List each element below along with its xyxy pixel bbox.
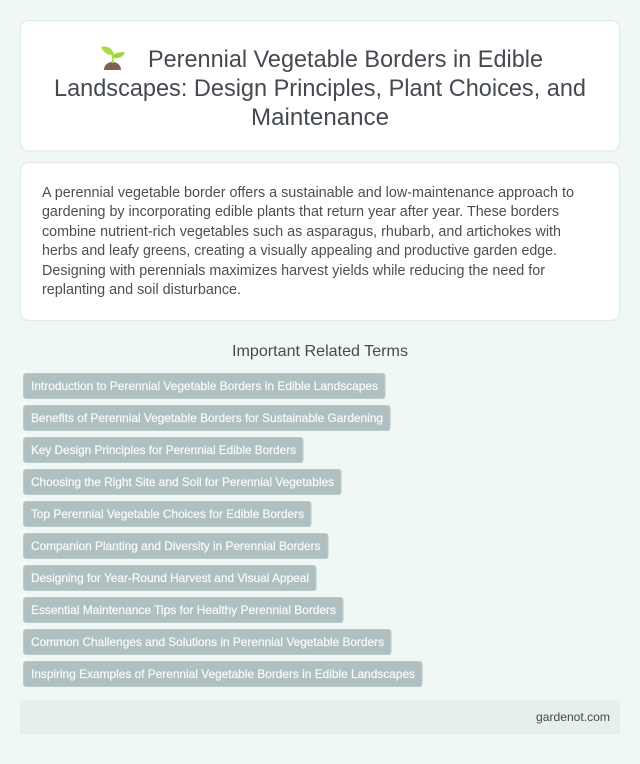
term 5 xyxy=(24,502,311,526)
panel: introduction card xyxy=(20,162,620,320)
term 8 xyxy=(24,598,343,622)
term 2 xyxy=(24,406,390,430)
term 10: Inspiring Examples of Perennial Vegetable Borders in Edible Landscapes xyxy=(31,667,415,681)
term 9: Common Challenges and Solutions in Perennial Vegetable Borders xyxy=(31,635,384,649)
term 7: Designing for Year-Round Harvest and Visual Appeal xyxy=(31,571,309,585)
text block: introduction: Designing with perennials maximizes harvest yields while reducing the need for xyxy=(42,263,545,279)
term 1 xyxy=(24,374,385,398)
text block: introduction xyxy=(42,185,574,298)
text block: introduction: gardening by incorporating edible plants that return year after year. These borders xyxy=(42,204,559,220)
term 9 xyxy=(24,630,391,654)
footer: gardenot.com xyxy=(536,710,610,724)
title: Maintenance xyxy=(251,104,389,131)
list: related terms xyxy=(24,374,422,686)
text block: introduction: herbs and leafy greens, creating a visually appealing and productive garden edge. xyxy=(42,243,557,259)
icon: seedling xyxy=(101,46,125,70)
title: Perennial Vegetable Borders in Edible xyxy=(148,46,543,73)
term 3: Key Design Principles for Perennial Edible Borders xyxy=(31,443,296,457)
term 4 xyxy=(24,470,341,494)
term 8: Essential Maintenance Tips for Healthy Perennial Borders xyxy=(31,603,336,617)
term 3 xyxy=(24,438,303,462)
footer xyxy=(20,700,620,734)
title: Landscapes: Design Principles, Plant Choices, and xyxy=(54,75,586,102)
term 6: Companion Planting and Diversity in Perennial Borders xyxy=(31,539,320,553)
title xyxy=(54,46,586,131)
text block: introduction: replanting and soil disturbance. xyxy=(42,282,241,298)
text block: introduction: combine nutrient-rich vegetables such as asparagus, rhubarb, and artichokes with xyxy=(42,224,561,240)
term 2: Benefits of Perennial Vegetable Borders for Sustainable Gardening xyxy=(31,411,383,425)
term 10 xyxy=(24,662,422,686)
term 5: Top Perennial Vegetable Choices for Edible Borders xyxy=(31,507,304,521)
panel: title card xyxy=(20,20,620,151)
term 6 xyxy=(24,534,328,558)
term 7 xyxy=(24,566,316,590)
heading: important related terms: Important Related Terms xyxy=(232,343,408,360)
term 4: Choosing the Right Site and Soil for Perennial Vegetables xyxy=(31,475,334,489)
text block: introduction: A perennial vegetable border offers a sustainable and low-maintenance approach to xyxy=(42,185,574,201)
term 1: Introduction to Perennial Vegetable Borders in Edible Landscapes xyxy=(31,379,378,393)
